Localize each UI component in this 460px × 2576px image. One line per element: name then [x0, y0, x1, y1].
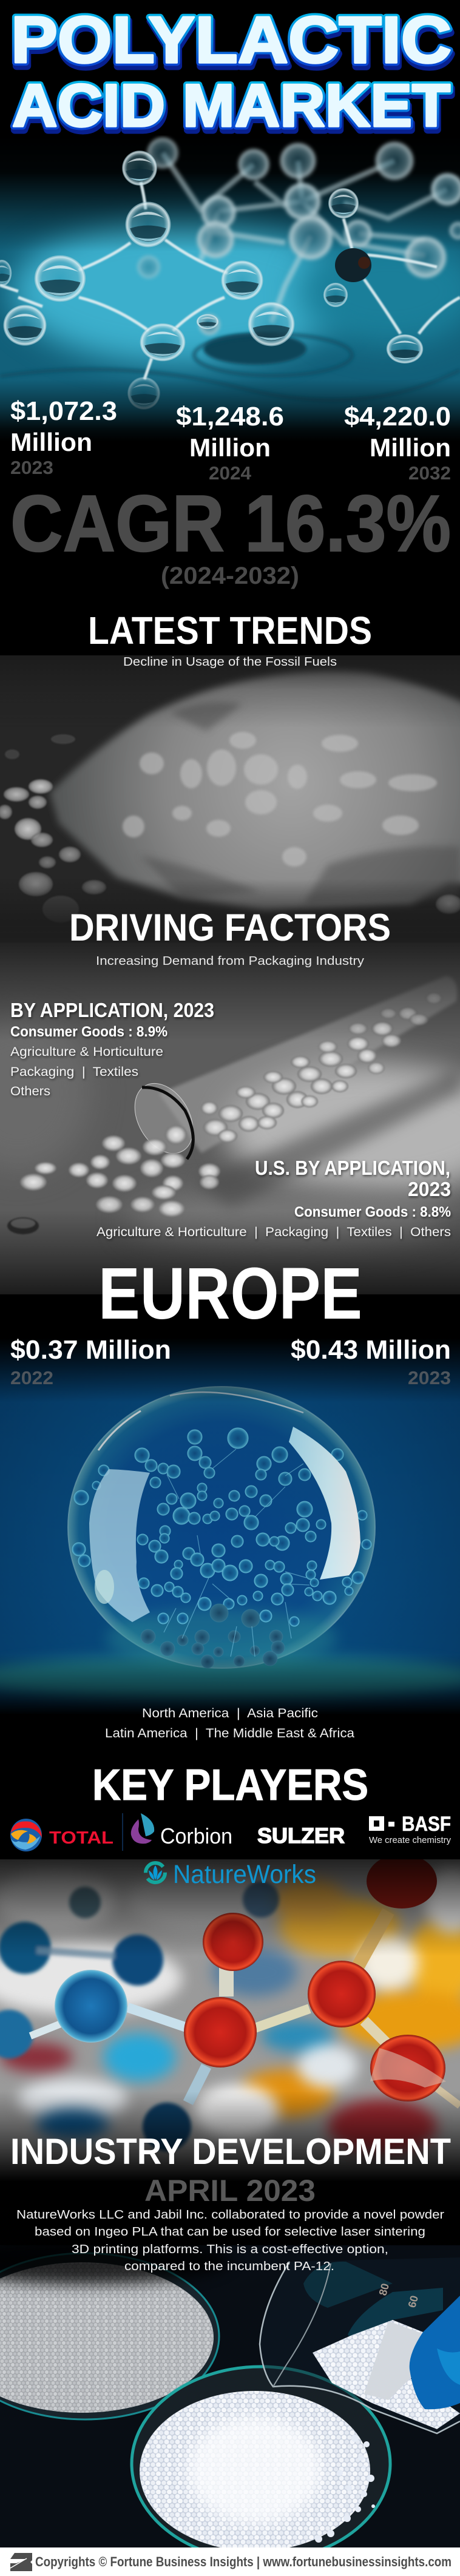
sharp molecule bonds: [0, 182, 460, 379]
title line 2: ACID MARKET: [12, 72, 450, 139]
stat: 2032 value: [344, 402, 451, 484]
U.S. by application block: [96, 1157, 451, 1239]
U.S. by application block: Consumer Goods : 8.8%: [294, 1204, 451, 1220]
blurred blue atoms: [0, 1881, 279, 2151]
title: [11, 3, 453, 143]
U.S. by application block: Agriculture & Horticulture | Packaging | Textiles | Others: [96, 1225, 451, 1239]
by application block: Others: [10, 1084, 50, 1098]
development text: compared to the incumbent PA-12.: [124, 2260, 334, 2273]
bonds: [30, 1912, 460, 2106]
driving factors heading: DRIVING FACTORS: [69, 907, 391, 949]
hero image: glass molecules: [0, 135, 460, 441]
development text: NatureWorks LLC and Jabil Inc. collaborated to provide a novel powder: [16, 2208, 444, 2222]
development text: based on Ingeo PLA that can be used for selective laser sintering: [35, 2225, 425, 2239]
Total wordmark: TOTAL: [49, 1828, 113, 1848]
other regions: [105, 1706, 354, 1740]
glove: [410, 2296, 460, 2409]
tube mouth: [135, 1083, 193, 1154]
footer: [0, 2547, 460, 2576]
logo: BASF: BASF: [402, 1813, 451, 1836]
title line 2: ACID MARKET: [12, 72, 450, 139]
stat: 2023 value: [10, 396, 117, 478]
key players heading: KEY PLAYERS: [92, 1761, 368, 1810]
by application block: BY APPLICATION, 2023: [10, 999, 214, 1021]
development text: [16, 2208, 444, 2273]
sharp atoms: [55, 1970, 127, 2043]
bubble stems: [164, 1449, 309, 1657]
driving factors subtitle: Increasing Demand from Packaging Industry: [96, 955, 364, 968]
scattered pellets: [0, 734, 460, 922]
lab dishes image: [0, 2236, 460, 2561]
pellets in beaker: [313, 2320, 460, 2429]
stat: 2024 value: 2024: [209, 462, 252, 484]
development date: APRIL 2023: [144, 2174, 316, 2208]
logo: Total: [10, 1819, 113, 1851]
teal water: [0, 174, 460, 434]
stat: 2024 value: $1,248.6: [176, 402, 284, 431]
title line 1: POLYLACTIC: [11, 3, 452, 77]
by application block: [10, 999, 214, 1098]
logo: BASF: We create chemistry: [369, 1835, 451, 1845]
beaker: [260, 2257, 460, 2433]
pellets in tube: [201, 992, 442, 1143]
logo: Corbion: [131, 1813, 232, 1848]
spilled pellets: [7, 1125, 220, 1234]
stat: 2024 value: Million: [189, 433, 271, 462]
test tube: [123, 976, 457, 1164]
logo: NatureWorks: NatureWorks: [173, 1860, 316, 1889]
development text: 3D printing platforms. This is a cost-effective option,: [72, 2243, 388, 2256]
Europe 2023 value: [291, 1335, 451, 1388]
Corbion wordmark: Corbion: [160, 1824, 232, 1848]
shadow of tube: [194, 1068, 460, 1208]
blurred backdrop blobs: [0, 1866, 460, 2154]
other regions: North America | Asia Pacific: [142, 1706, 318, 1720]
U.S. by application block: 2023: [408, 1178, 451, 1200]
stat: 2032 value: $4,220.0: [344, 402, 451, 431]
footer logo: [10, 2553, 32, 2571]
by application block: Consumer Goods : 8.9%: [10, 1024, 167, 1040]
sharp atoms: [122, 150, 157, 186]
left dish: [0, 2236, 231, 2419]
stat: 2023 value: $1,072.3: [10, 396, 117, 426]
stat: 2023 value: 2023: [10, 457, 53, 478]
stat: 2032 value: 2032: [408, 462, 451, 484]
title line 1: POLYLACTIC: [12, 7, 453, 81]
Europe 2022 value: [10, 1335, 171, 1388]
by application block: Packaging | Textiles: [10, 1065, 138, 1079]
stat: 2032 value: Million: [370, 433, 451, 462]
Europe 2023 value: $0.43 Million: [291, 1335, 451, 1365]
molecule image: [0, 1854, 460, 2182]
Europe 2022 value: $0.37 Million: [10, 1335, 171, 1365]
driving factors image: test tube with pellets: [0, 942, 460, 1294]
right dish: [132, 2367, 390, 2561]
mound: [50, 671, 460, 910]
blurred background atoms: [137, 137, 460, 336]
other regions: Latin America | The Middle East & Africa: [105, 1726, 354, 1740]
title line 2: ACID MARKET: [13, 75, 452, 143]
light falloff: [225, 1062, 460, 1195]
Europe heading: EUROPE: [98, 1252, 362, 1334]
stat: 2024 value: [176, 402, 284, 484]
sphere: [68, 1387, 375, 1668]
Europe 2022 value: 2022: [10, 1367, 53, 1388]
graduation marks: [377, 2282, 421, 2309]
logo: Sulzer: SULZER: [257, 1824, 345, 1848]
title line 1: POLYLACTIC: [11, 3, 452, 77]
latest trends image: pellet mound: [0, 655, 460, 942]
dark lower bubbles: [141, 1604, 285, 1668]
logo: BASF: [369, 1813, 451, 1845]
latest trends subtitle: Decline in Usage of the Fossil Fuels: [123, 655, 337, 669]
latest trends heading: LATEST TRENDS: [88, 609, 372, 652]
highlights: [123, 732, 437, 867]
bubbles: [72, 1428, 371, 1626]
left highlight arc: [89, 1469, 150, 1622]
stat: 2023 value: Million: [10, 428, 92, 456]
Europe 2023 value: 2023: [408, 1367, 451, 1388]
graduation marks: 60: [406, 2294, 421, 2309]
green glow: [0, 1655, 460, 1701]
graduation marks: 80: [377, 2282, 391, 2297]
Europe image: glass sphere: [0, 1338, 460, 1715]
by application block: Agriculture & Horticulture: [10, 1045, 163, 1059]
right highlight arc: [289, 1427, 360, 1580]
CAGR period: (2024-2032): [161, 563, 299, 589]
